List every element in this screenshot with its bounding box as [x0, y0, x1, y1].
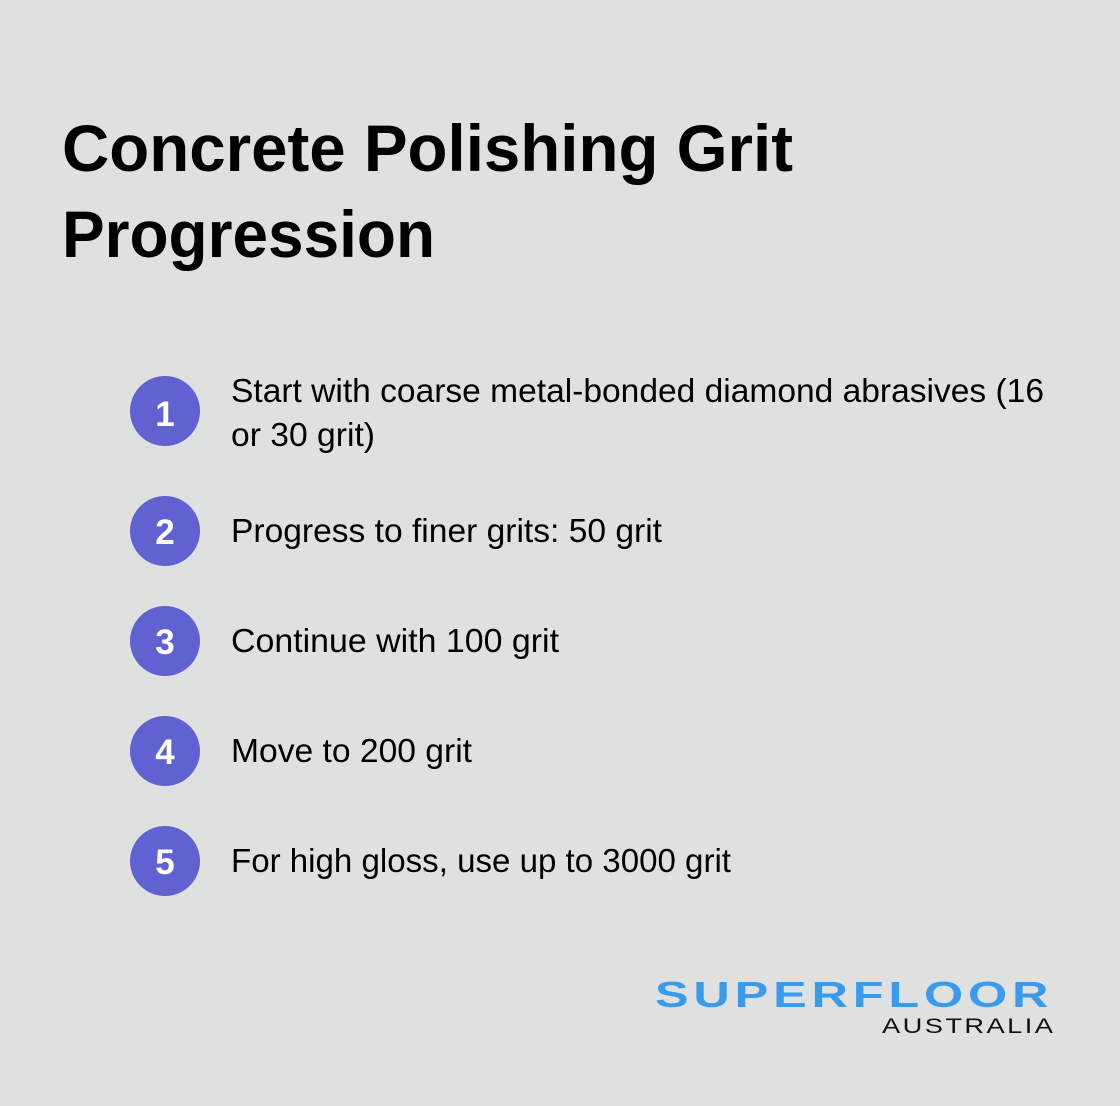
number badge 5 — [130, 826, 200, 896]
step 4 — [130, 716, 472, 786]
logo: Superfloor Australia: AUSTRALIA — [882, 1015, 1054, 1038]
title: Concrete Polishing Grit — [62, 111, 793, 185]
step 4 text: Move to 200 grit — [231, 732, 472, 769]
number badge 3 — [130, 606, 200, 676]
step 2 — [130, 496, 662, 566]
number badge 4: 4 — [155, 733, 175, 772]
step 5 — [130, 826, 731, 896]
number badge 4 — [130, 716, 200, 786]
step 2 text: Progress to finer grits: 50 grit — [231, 512, 662, 549]
number badge 2: 2 — [155, 513, 175, 552]
step 1 text: or 30 grit) — [231, 416, 375, 453]
step 1 text — [231, 372, 1044, 453]
number badge 2 — [130, 496, 200, 566]
step 3 — [130, 606, 559, 676]
step 1 text: Start with coarse metal-bonded diamond abrasives (16 — [231, 372, 1044, 409]
title — [62, 111, 793, 271]
logo: Superfloor Australia: SUPERFLOOR — [655, 975, 1048, 1015]
title: Progression — [62, 197, 435, 271]
step 1 — [130, 372, 1044, 453]
number badge 1: 1 — [155, 395, 175, 434]
step 5 text: For high gloss, use up to 3000 grit — [231, 842, 731, 879]
step 3 text: Continue with 100 grit — [231, 622, 559, 659]
logo: Superfloor Australia — [655, 975, 1054, 1038]
number badge 5: 5 — [155, 843, 175, 882]
number badge 3: 3 — [155, 623, 175, 662]
number badge 1 — [130, 376, 200, 446]
